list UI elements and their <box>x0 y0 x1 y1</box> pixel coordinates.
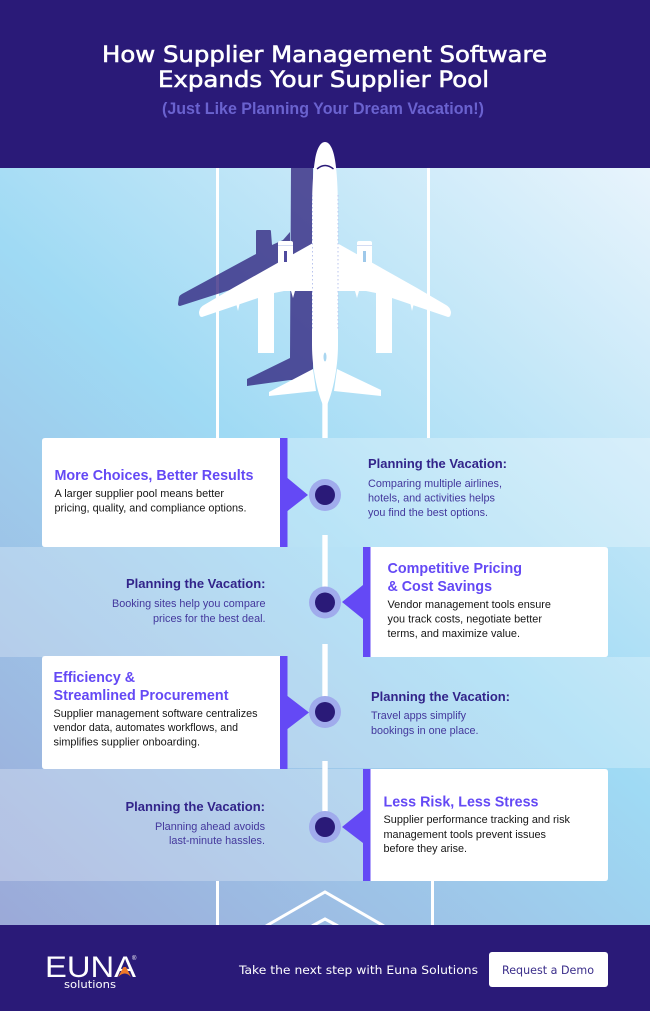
fuselage <box>312 142 338 404</box>
flap fairings <box>236 291 414 311</box>
panel: efficiency <box>42 656 341 769</box>
panel: more choices: A larger supplier pool means better <box>54 488 224 500</box>
title: Expands Your Supplier Pool <box>158 67 489 93</box>
text: vacation 4: last-minute hassles. <box>169 835 265 847</box>
centre line segments <box>322 535 328 816</box>
text: vacation 1: you find the best options. <box>368 507 488 519</box>
title <box>102 42 547 93</box>
panel: less risk <box>309 769 608 881</box>
row 1 band <box>287 438 650 547</box>
text: vacation 2: Planning the Vacation: <box>126 576 266 591</box>
button: request a demo <box>489 952 608 987</box>
panel: competitive pricing: Vendor management tools ensure <box>388 599 551 611</box>
row 3 band <box>287 657 650 768</box>
panel: more choices <box>42 438 341 547</box>
text: vacation 2: prices for the best deal. <box>153 613 266 625</box>
text: vacation 1: Comparing multiple airlines, <box>368 478 502 490</box>
text: vacation 3: Planning the Vacation: <box>371 689 510 704</box>
panel: competitive pricing: Competitive Pricing <box>388 561 522 577</box>
panel: less risk: Supplier performance tracking and risk <box>384 814 570 826</box>
panel: efficiency: Streamlined Procurement <box>54 688 229 704</box>
panel: competitive pricing: you track costs, negotiate better <box>388 614 542 626</box>
call to action text: Take the next step with Euna Solutions <box>238 963 478 977</box>
text: vacation 1: Planning the Vacation: <box>368 456 507 471</box>
row 4 band <box>0 769 363 881</box>
engines <box>278 241 372 265</box>
button: request a demo: Request a Demo <box>502 963 594 977</box>
panel: competitive pricing <box>309 547 608 657</box>
runway lines <box>216 168 434 925</box>
text: vacation 1 <box>368 456 507 519</box>
text: vacation 4 <box>126 799 265 847</box>
runway chevrons <box>266 892 384 926</box>
panel: efficiency: simplifies supplier onboarding. <box>54 736 200 748</box>
text: vacation 2 <box>112 576 266 625</box>
tailplane <box>269 369 381 396</box>
row 2 band <box>0 547 363 657</box>
header band <box>0 0 650 168</box>
logo: Euna Solutions: ® <box>132 955 137 962</box>
panel: less risk: management tools prevent issues <box>384 829 546 841</box>
windows <box>312 195 338 330</box>
text: vacation 4: Planning the Vacation: <box>126 799 265 814</box>
sky background <box>0 168 650 925</box>
logo: Euna Solutions: EUNA <box>45 951 136 984</box>
tail vent <box>324 352 326 362</box>
panel: efficiency: Supplier management software centralizes <box>54 708 258 720</box>
subtitle: (Just Like Planning Your Dream Vacation!) <box>162 100 484 118</box>
right wing <box>337 243 451 353</box>
footer band <box>0 925 650 1011</box>
panel: more choices: More Choices, Better Results <box>54 468 254 484</box>
text: vacation 3: bookings in one place. <box>371 725 478 737</box>
text: vacation 3 <box>371 689 510 737</box>
cockpit window <box>317 166 334 169</box>
plane <box>199 142 451 404</box>
left wing <box>199 243 313 353</box>
text: vacation 3: Travel apps simplify <box>371 710 466 722</box>
panel: less risk: Less Risk, Less Stress <box>384 794 538 810</box>
panel: efficiency: Efficiency & <box>54 670 135 686</box>
title: How Supplier Management Software <box>102 42 547 68</box>
text: vacation 4: Planning ahead avoids <box>155 821 265 833</box>
logo: Euna Solutions: solutions <box>64 979 116 991</box>
plane shadow <box>178 168 313 386</box>
panel: competitive pricing: & Cost Savings <box>388 579 492 595</box>
panel: efficiency: vendor data, automates workflows, and <box>54 722 238 734</box>
text: vacation 1: hotels, and activities helps <box>368 492 495 504</box>
panel: more choices: pricing, quality, and compliance options. <box>54 502 246 514</box>
panel: competitive pricing: terms, and maximize value. <box>388 628 520 640</box>
text: vacation 2: Booking sites help you compare <box>112 598 266 610</box>
panel: less risk: before they arise. <box>384 843 467 855</box>
